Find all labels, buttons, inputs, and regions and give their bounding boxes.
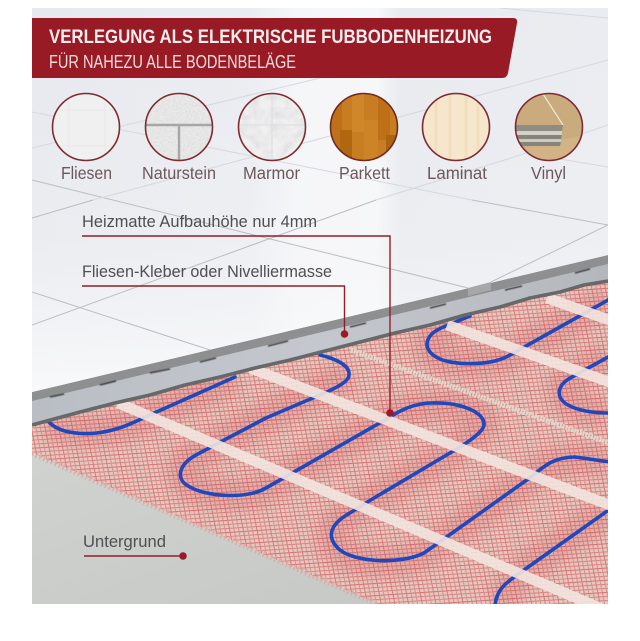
material: Fliesen: Fliesen xyxy=(61,163,112,183)
callout: Untergrund xyxy=(83,532,187,560)
material: Laminat: Laminat xyxy=(427,163,487,183)
callout: Heizmatte xyxy=(82,212,394,417)
grout lines xyxy=(32,180,608,357)
banner xyxy=(32,18,517,78)
material: Fliesen xyxy=(52,92,120,179)
banner heading: VERLEGUNG ALS ELEKTRISCHE FUBBODENHEIZUNG xyxy=(49,26,492,48)
material: Laminat xyxy=(422,92,490,179)
banner subheading: FÜR NAHEZU ALLE BODENBELÄGE xyxy=(49,52,296,72)
material: Marmor: Marmor xyxy=(243,163,300,183)
tile surface xyxy=(32,8,608,392)
spacer strips xyxy=(118,298,612,608)
adhesive layer xyxy=(32,255,608,425)
callout: Fliesen-Kleber xyxy=(82,262,348,338)
material: Naturstein: Naturstein xyxy=(142,163,216,183)
material: Naturstein xyxy=(142,90,216,183)
callout: Heizmatte: Heizmatte Aufbauhöhe nur 4mm xyxy=(82,212,317,231)
faint upper grout lines xyxy=(32,8,608,200)
material: Marmor xyxy=(238,92,306,179)
callout: Fliesen-Kleber: Fliesen-Kleber oder Nivelliermasse xyxy=(82,262,332,281)
material: Vinyl: Vinyl xyxy=(531,163,566,183)
material: Parkett xyxy=(330,92,398,179)
material: Parkett: Parkett xyxy=(339,163,390,183)
subfloor ground xyxy=(32,454,378,604)
heating cables xyxy=(49,299,610,606)
material: Vinyl xyxy=(513,90,585,183)
heating mat mesh xyxy=(32,280,608,604)
callout: Untergrund: Untergrund xyxy=(83,532,166,551)
